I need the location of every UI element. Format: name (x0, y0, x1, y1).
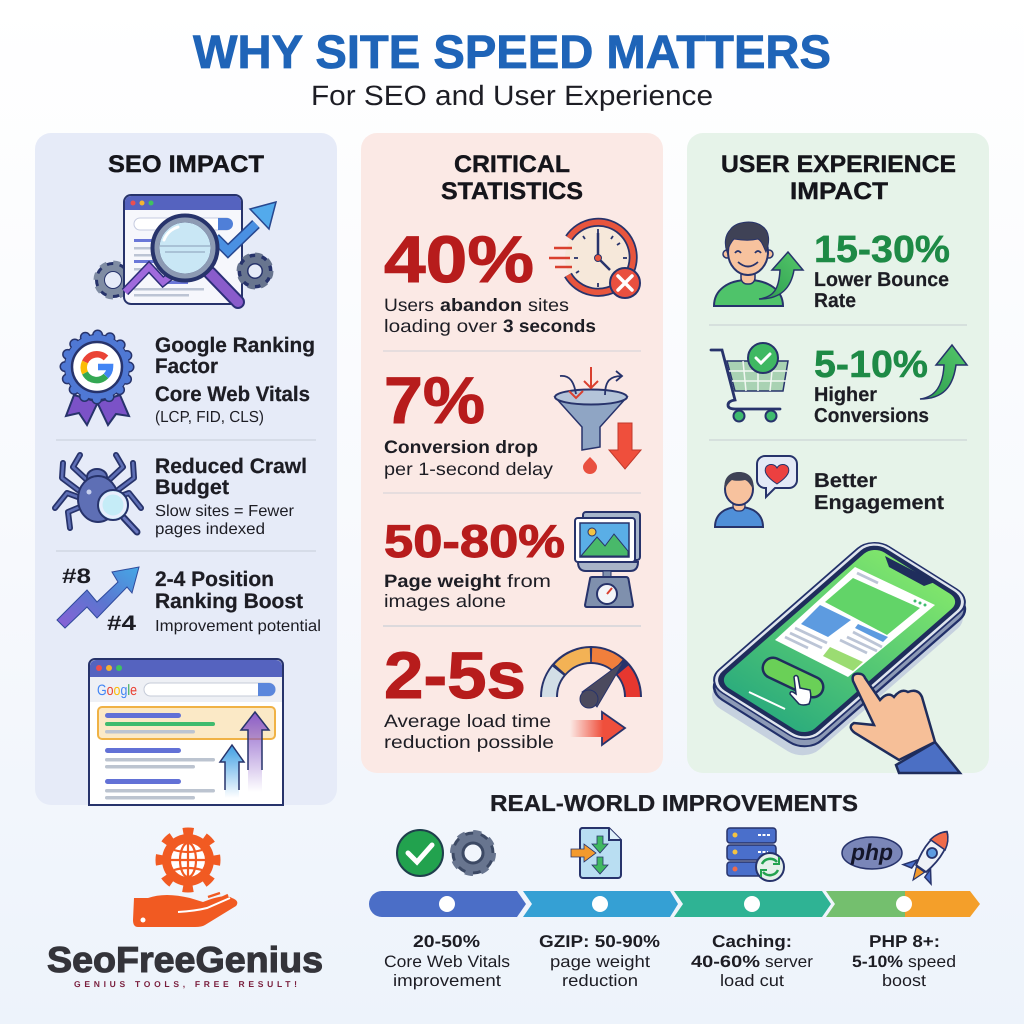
caption: caching: Caching: (712, 932, 792, 951)
icon: ranking arrow from #8 to #4: #4 (107, 612, 136, 635)
icon: PHP logo and rocket (842, 822, 961, 890)
text: Google ranking factor: Core Web Vitals (155, 383, 310, 406)
heading: SEO impact: SEO IMPACT (108, 151, 264, 178)
section: real-world improvements (369, 790, 980, 990)
caption: GZIP (539, 932, 660, 990)
heading: critical statistics: CRITICAL (454, 151, 570, 178)
text: ranking boost: 2-4 Position (155, 568, 274, 591)
icon: clock with X badge (549, 222, 640, 298)
panel: SEO impact (35, 133, 337, 805)
progress arrow bar (369, 891, 980, 917)
caption: core web vitals: Core Web Vitals (384, 953, 510, 971)
heading: user experience impact: USER EXPERIENCE (721, 151, 956, 178)
icon: PHP logo and rocket: php (850, 839, 893, 865)
text: load time description: reduction possible (384, 732, 554, 752)
text: ranking boost (155, 568, 321, 635)
icon: browser with magnifier, gears and growth arrows (98, 195, 276, 304)
icon: server with sync badge (727, 828, 784, 881)
caption: PHP 8+: boost (882, 972, 926, 990)
icon: speedometer gauge (549, 655, 633, 708)
icon: shopping cart with check (711, 343, 788, 422)
caption: core web vitals: 20-50% (413, 932, 480, 951)
icon: user with heart speech bubble (715, 456, 797, 527)
text: load time description: Average load time (384, 711, 551, 731)
text: page weight description: from (507, 571, 551, 591)
caption: caching: server (765, 953, 814, 971)
text: lower bounce rate (814, 269, 949, 312)
caption: PHP 8+ (852, 932, 956, 990)
heading: real-world improvements: REAL-WORLD IMPROVEMENTS (490, 790, 858, 816)
heading: user experience impact: IMPACT (790, 178, 888, 205)
text: abandon description: Users (384, 295, 434, 315)
text: ranking boost: Ranking Boost (155, 590, 303, 613)
text: abandon description: loading over (384, 316, 497, 336)
text: ranking boost: Improvement potential (155, 618, 321, 635)
stat: 7%: 7% (384, 363, 485, 437)
panel: user experience impact (687, 133, 989, 773)
caption: core web vitals: improvement (393, 972, 501, 990)
text: conversion drop description (384, 437, 553, 479)
text: reduced crawl budget: Slow sites = Fewer (155, 503, 295, 520)
text: load time description (384, 711, 554, 752)
text: page weight description: Page weight (384, 571, 501, 591)
logo tagline: GENIUS TOOLS, FREE RESULT! (74, 979, 297, 989)
illustration: search results browser: Google (97, 682, 137, 699)
icon: compressed file (571, 828, 621, 878)
heading: user experience impact (721, 151, 956, 205)
icon: funnel with drop and down arrow (555, 367, 641, 474)
icon: gear and globe over hand (133, 832, 237, 927)
text: reduced crawl budget: Reduced Crawl (155, 455, 307, 478)
text: conversion drop description: Conversion drop (384, 437, 538, 457)
heading: critical statistics (441, 151, 583, 205)
text: better engagement (814, 470, 944, 514)
stat: 50-80%: 50-80% (384, 515, 565, 567)
panel: critical statistics (361, 133, 663, 773)
icon: up arrow (920, 345, 967, 399)
stat: 5-10%: 5-10% (814, 344, 928, 386)
caption: caching: load cut (720, 972, 784, 990)
icon: spider with magnifier (55, 455, 141, 532)
text: reduced crawl budget (155, 455, 307, 538)
logo: SeoFreeGenius (47, 832, 323, 989)
text: reduced crawl budget: pages indexed (155, 521, 265, 538)
icon: check and gear (397, 830, 491, 876)
text: higher conversions: Conversions (814, 405, 929, 427)
text: better engagement: Engagement (814, 492, 944, 514)
caption: GZIP: page weight (550, 953, 650, 971)
text: abandon description: 3 seconds (503, 316, 596, 336)
illustration: search results browser (89, 659, 283, 805)
icon: ranking arrow from #8 to #4: #8 (62, 565, 91, 588)
icon: images on weighing scale (575, 512, 640, 607)
caption: GZIP: reduction (562, 972, 638, 990)
text: abandon description: abandon (440, 295, 522, 315)
logo wordmark: SeoFreeGenius (47, 939, 323, 980)
caption: caching: 40-60% (691, 953, 760, 971)
text: better engagement: Better (814, 470, 877, 492)
icon: right arrow (570, 712, 625, 745)
text: lower bounce rate: Rate (814, 290, 856, 312)
illustration: smartphone with hand (703, 536, 974, 773)
text: abandon description: sites (528, 295, 569, 315)
stat: 2-5s: 2-5s (384, 638, 526, 712)
icon: Google ribbon badge (64, 334, 130, 425)
caption: caching (691, 932, 814, 990)
text: lower bounce rate: Lower Bounce (814, 269, 949, 291)
caption: PHP 8+: PHP 8+: (869, 932, 940, 951)
text: Google ranking factor: Google Ranking (155, 334, 315, 357)
text: higher conversions (814, 384, 929, 427)
icon: happy user with up arrow (714, 222, 803, 306)
text: higher conversions: Higher (814, 384, 877, 406)
caption: GZIP: GZIP: 50-90% (539, 932, 660, 951)
text: Google ranking factor: Factor (155, 355, 218, 378)
subtitle: For SEO and User Experience (311, 80, 713, 111)
text: Google ranking factor: (LCP, FID, CLS) (155, 409, 264, 426)
caption: core web vitals (384, 932, 510, 990)
icon: ranking arrow from #8 to #4 (57, 565, 139, 635)
caption: PHP 8+: speed (908, 953, 956, 971)
heading: critical statistics: STATISTICS (441, 178, 583, 205)
text: reduced crawl budget: Budget (155, 476, 229, 499)
text: conversion drop description: per 1-second delay (384, 459, 553, 479)
stat: 40%: 40% (384, 222, 534, 296)
text: page weight description: images alone (384, 591, 506, 611)
text: Google ranking factor (155, 334, 315, 426)
caption: PHP 8+: 5-10% (852, 953, 903, 971)
title: WHY SITE SPEED MATTERS (193, 25, 831, 78)
stat: 15-30%: 15-30% (814, 229, 950, 271)
